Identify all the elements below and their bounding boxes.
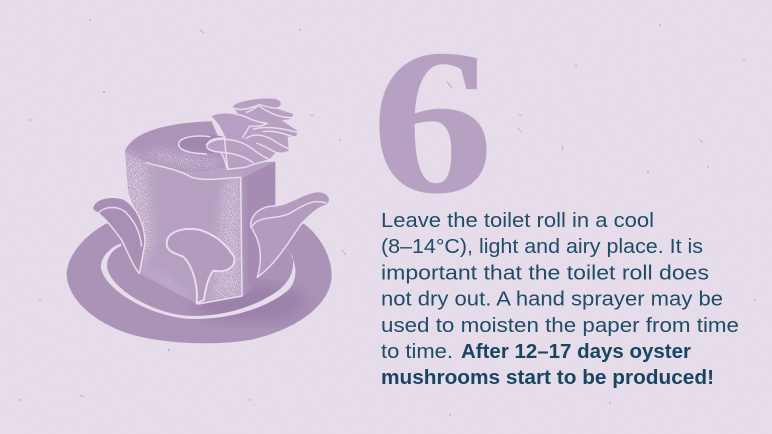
body text: mushrooms start to be produced! — [381, 367, 714, 389]
body text: After 12–17 days oyster — [461, 341, 691, 363]
body text — [381, 210, 739, 389]
body text: not dry out. A hand sprayer may be — [381, 288, 723, 310]
roll outlines — [147, 136, 242, 304]
body text: to time. — [381, 341, 453, 363]
left mushroom — [93, 197, 145, 273]
body text: used to moisten the paper from time — [381, 315, 739, 337]
body text: Leave the toilet roll in a cool — [381, 210, 654, 232]
big numeral 6: 6 — [371, 7, 494, 237]
center mushroom — [167, 229, 234, 303]
illustration: toilet roll with oyster mushrooms on a plate — [67, 98, 332, 343]
right mushroom — [251, 192, 330, 277]
plate — [67, 223, 332, 343]
body text: (8–14°C), light and airy place. It is — [381, 236, 703, 258]
roll body — [122, 121, 275, 304]
mushroom cluster on top — [207, 98, 298, 169]
body text: important that the toilet roll does — [381, 262, 709, 284]
